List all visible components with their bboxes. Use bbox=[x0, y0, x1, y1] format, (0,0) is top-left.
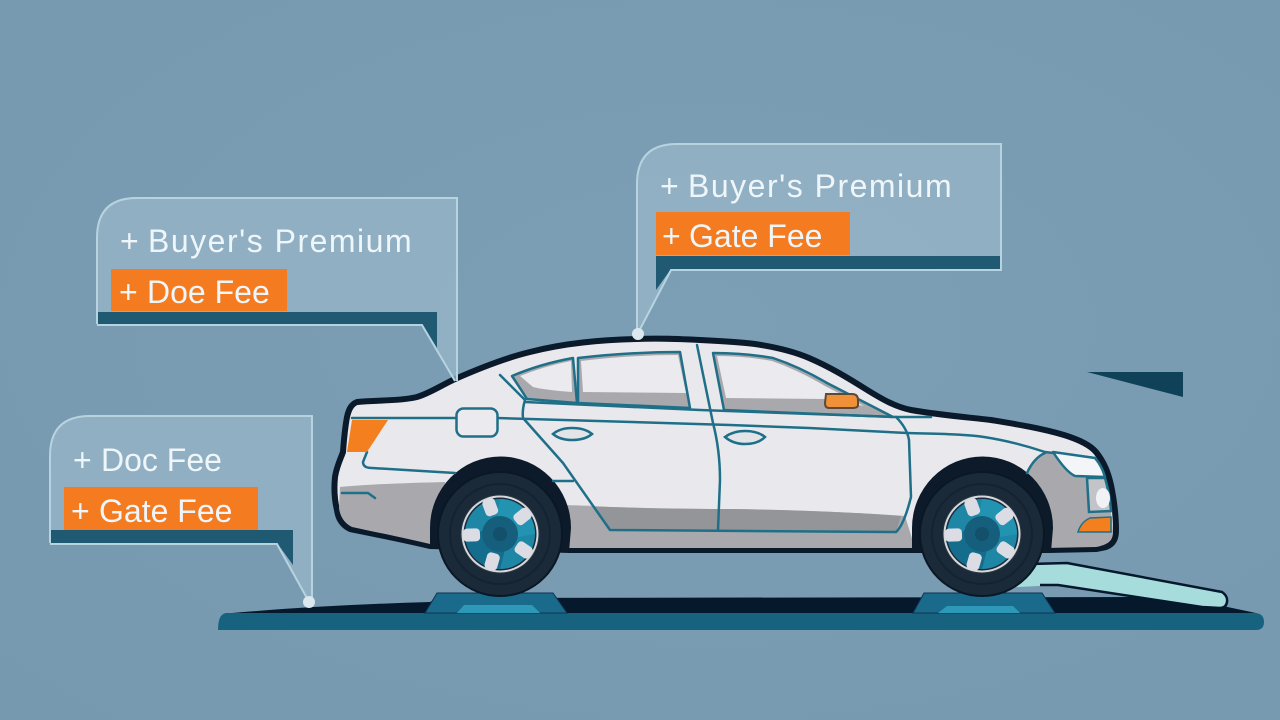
fee row: buyer's premium: + bbox=[120, 223, 139, 259]
rear wheel bbox=[438, 472, 562, 596]
fee row: buyer's premium: Buyer's Premium bbox=[688, 168, 953, 204]
decorative dark wedge bbox=[1087, 372, 1183, 397]
rear side window bbox=[512, 358, 577, 403]
ramp bbox=[1000, 563, 1227, 608]
callout: ground fees bbox=[50, 416, 315, 608]
fuel door bbox=[456, 408, 498, 436]
callout: roof fees bbox=[632, 144, 1001, 340]
front lift pad bbox=[913, 593, 1055, 613]
front grey bumper bbox=[1027, 452, 1113, 548]
highlighted fee: doe fee: + bbox=[119, 274, 138, 310]
car bbox=[334, 339, 1116, 596]
callout outline bbox=[50, 416, 312, 600]
fee row: doc fee: + bbox=[73, 442, 92, 478]
highlighted fee: gate fee: + bbox=[662, 218, 681, 254]
highlighted fee: gate fee bbox=[64, 487, 258, 530]
rear door handle bbox=[553, 428, 592, 440]
highlighted fee: doe fee bbox=[111, 269, 287, 311]
ground platform bbox=[218, 593, 1264, 630]
lower grey sill bbox=[565, 505, 915, 548]
rear lift pad bbox=[425, 593, 567, 613]
car body bbox=[334, 339, 1116, 550]
body lines bbox=[342, 345, 1095, 532]
rear door window bbox=[578, 352, 690, 408]
front door handle bbox=[725, 431, 765, 444]
anchor dot bbox=[303, 596, 315, 608]
callout outline bbox=[637, 144, 1001, 333]
front grille with lamp bbox=[1087, 478, 1111, 512]
front door window bbox=[713, 353, 893, 417]
highlighted fee: gate fee: Gate Fee bbox=[689, 218, 822, 254]
headlight bbox=[1053, 452, 1105, 477]
side mirror bbox=[825, 394, 858, 408]
highlighted fee: gate fee: + bbox=[71, 493, 90, 529]
fee row: buyer's premium: + bbox=[660, 168, 679, 204]
fog lamp bbox=[1078, 517, 1111, 532]
fee row: doc fee: Doc Fee bbox=[101, 442, 222, 478]
fee row: buyer's premium: Buyer's Premium bbox=[148, 223, 413, 259]
callout shadow band bbox=[656, 256, 1000, 290]
callout shadow band bbox=[51, 530, 293, 565]
callout: rear roof fees bbox=[97, 198, 457, 381]
front wheel bbox=[920, 472, 1044, 596]
highlighted fee: doe fee: Doe Fee bbox=[147, 274, 270, 310]
tail lamp bbox=[347, 420, 388, 452]
highlighted fee: gate fee: Gate Fee bbox=[99, 493, 232, 529]
highlighted fee: gate fee bbox=[656, 212, 850, 255]
lower grey rear bbox=[339, 482, 445, 544]
rear wheel arch bbox=[430, 456, 571, 552]
anchor dot bbox=[632, 328, 644, 340]
callout shadow band bbox=[98, 312, 437, 348]
front wheel arch bbox=[912, 456, 1053, 552]
callout outline bbox=[97, 198, 457, 381]
